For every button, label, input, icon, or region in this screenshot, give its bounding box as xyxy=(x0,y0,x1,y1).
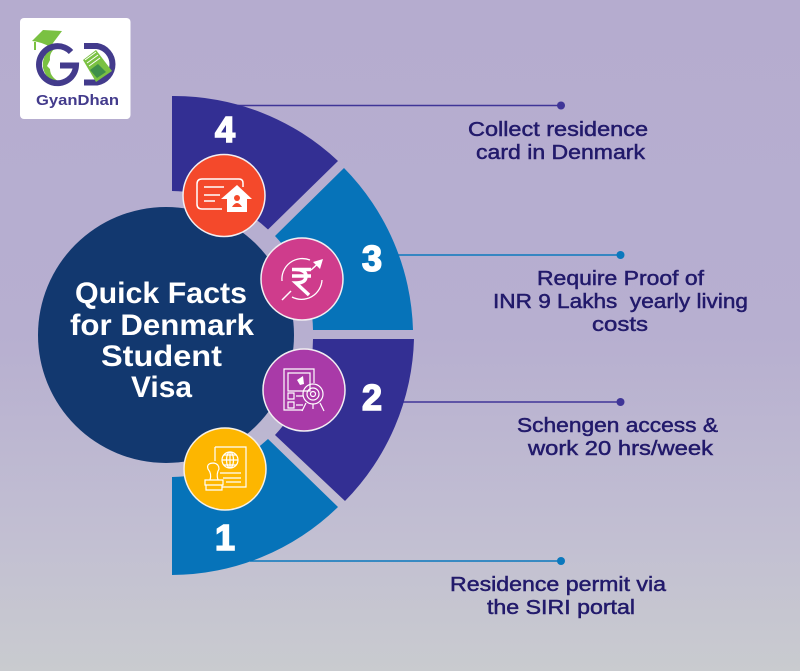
logo: banknotes xyxy=(83,50,112,82)
logo: letter G xyxy=(39,46,76,83)
caption 3 xyxy=(493,267,748,336)
leader line 4 xyxy=(238,102,565,110)
leader line 1 xyxy=(250,557,565,565)
caption 2: work 20 hrs/week xyxy=(527,437,714,460)
icon: residence card and house xyxy=(183,154,265,236)
number 2: 2 xyxy=(362,377,382,418)
segment 3 xyxy=(275,168,413,330)
caption 2 xyxy=(517,414,718,460)
segment 4 xyxy=(172,96,338,230)
title: Student xyxy=(101,340,222,373)
logo: letter D xyxy=(84,46,112,82)
icon: rupee with arrow xyxy=(261,238,343,320)
central circle xyxy=(38,207,294,463)
number 4: 4 xyxy=(215,109,235,150)
leader line 2 xyxy=(400,398,624,406)
logo: face crescent xyxy=(43,47,62,83)
segment 1 xyxy=(172,439,338,575)
number 3: 3 xyxy=(362,238,382,279)
caption 2: Schengen access & xyxy=(517,414,718,437)
title: Visa xyxy=(131,371,192,404)
caption 1: Residence permit via xyxy=(450,573,667,596)
caption 4 xyxy=(468,118,648,164)
title xyxy=(70,277,254,404)
caption 4: Collect residence xyxy=(468,118,648,141)
number 1: 1 xyxy=(215,517,235,558)
segment 2 xyxy=(275,339,414,501)
caption 3: INR 9 Lakhs yearly living xyxy=(493,290,748,313)
logo: graduation cap xyxy=(32,30,62,50)
caption 4: card in Denmark xyxy=(476,141,646,164)
title: for Denmark xyxy=(70,309,254,342)
logo card xyxy=(20,18,130,119)
caption 3: Require Proof of xyxy=(537,267,704,290)
icon: target and checklist xyxy=(263,349,345,431)
caption 3: costs xyxy=(592,313,648,336)
title: Quick Facts xyxy=(75,277,247,310)
caption 1: the SIRI portal xyxy=(487,596,635,619)
caption 1 xyxy=(450,573,667,619)
leader line 3 xyxy=(398,251,624,259)
icon: passport and stamp xyxy=(184,428,266,510)
logo wordmark: GyanDhan xyxy=(36,93,119,109)
